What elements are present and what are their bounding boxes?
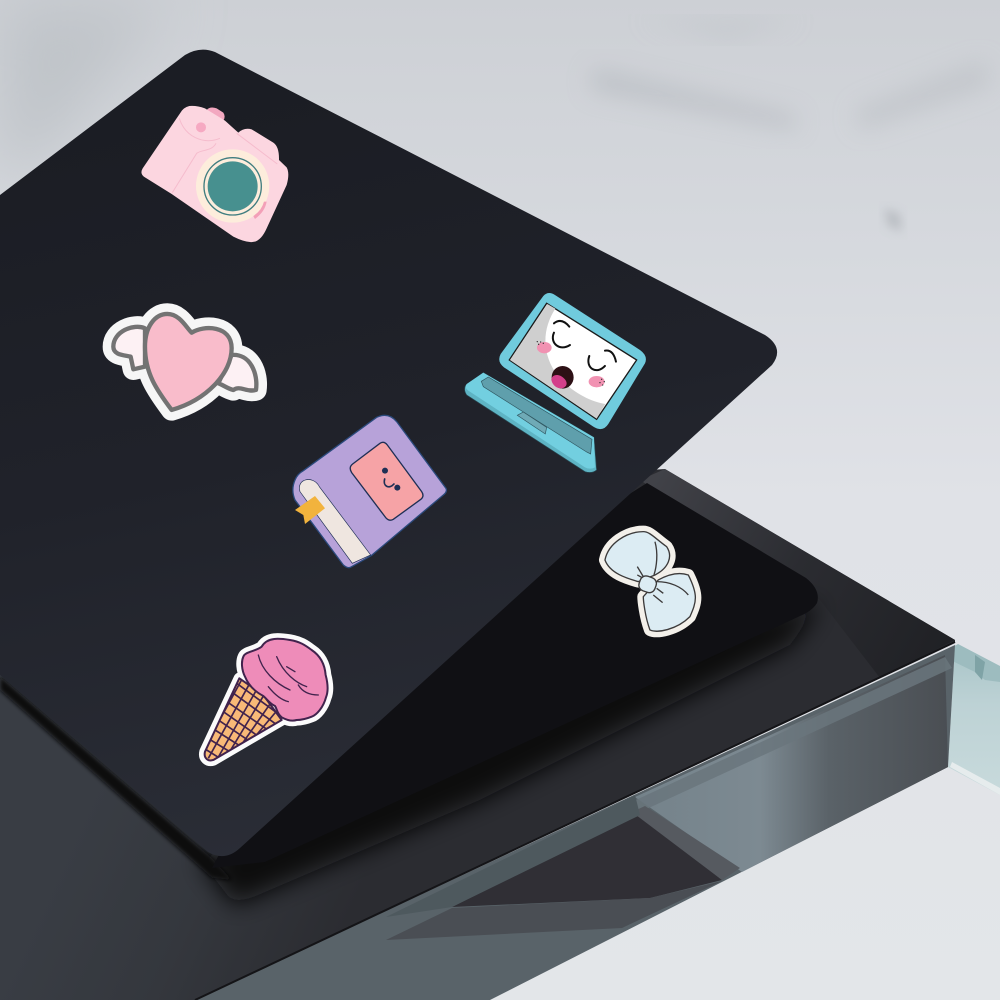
sticker: winged heart <box>113 314 256 410</box>
sticker: purple book <box>293 415 446 568</box>
sticker: blue bow <box>605 532 695 631</box>
laptop shadow on table <box>0 605 820 905</box>
laptop base <box>212 483 818 868</box>
sticker: camera <box>141 106 288 242</box>
glass table corner <box>940 644 1000 795</box>
table front glass face <box>195 642 955 1000</box>
sticker: sleepy laptop <box>465 293 646 473</box>
laptop lid <box>0 50 777 856</box>
sticker: ice cream cone <box>203 639 328 767</box>
table top surface <box>0 469 955 1000</box>
